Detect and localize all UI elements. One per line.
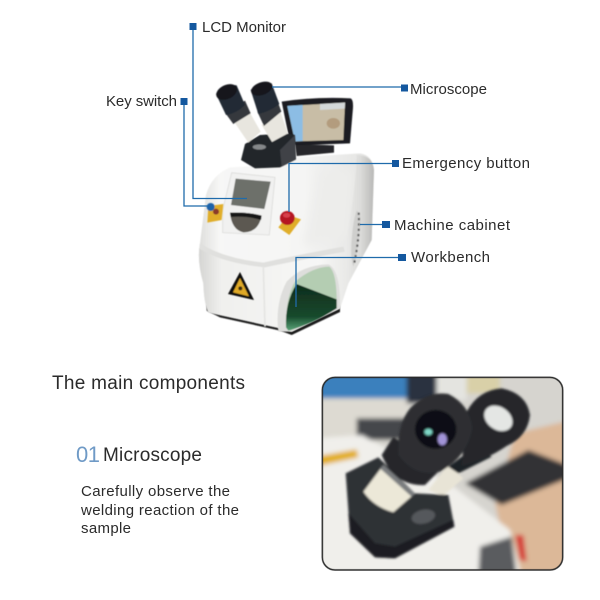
left eyepiece: [225, 101, 251, 124]
microscope base: [241, 133, 296, 168]
component description: sample: [81, 520, 131, 537]
workbench opening: [278, 264, 340, 332]
component number: 01: [76, 442, 100, 467]
section heading: The main components: [52, 373, 245, 394]
right eyepiece: [257, 101, 281, 126]
emergency button: [278, 211, 301, 235]
right tube: [262, 111, 288, 142]
photo background: [322, 378, 562, 570]
microscope: [214, 79, 296, 168]
machine feet: [207, 305, 340, 335]
leader lines: [184, 27, 403, 307]
machine illustration: [199, 79, 374, 335]
monitor: [282, 98, 353, 156]
left tube: [234, 112, 261, 143]
machine cabinet: [199, 153, 374, 332]
microscope base: [346, 457, 454, 558]
component description: [80, 483, 239, 537]
front tube: [363, 465, 415, 512]
label: Workbench: Workbench: [411, 249, 490, 266]
label: Emergency button: Emergency button: [402, 155, 530, 172]
front eyepiece: [398, 393, 472, 473]
label: Microscope: Microscope: [410, 81, 487, 98]
rear eyepiece: [428, 465, 463, 496]
label: Key switch: Key switch: [106, 93, 177, 110]
front control panel: [223, 173, 275, 235]
component description: Carefully observe the: [81, 483, 230, 500]
photo: microscope close-up: [321, 376, 564, 571]
key switch: [207, 203, 223, 223]
component description: welding reaction of the: [80, 502, 239, 519]
front collar: [382, 437, 440, 485]
label: LCD Monitor: LCD Monitor: [202, 19, 286, 36]
label: Machine cabinet: Machine cabinet: [394, 217, 511, 234]
cabinet vent: [351, 211, 361, 267]
laser warning sign: [228, 272, 254, 300]
component title: Microscope: [103, 445, 202, 466]
